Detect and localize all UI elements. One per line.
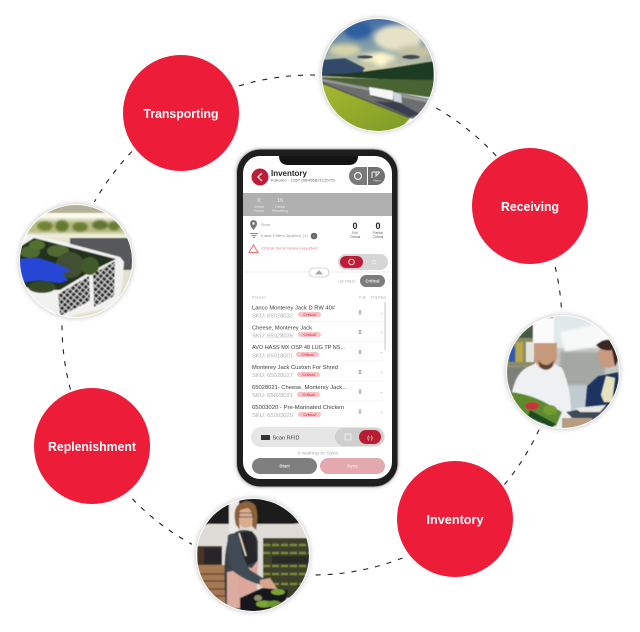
row 1: SKU: 65028032 <box>252 314 293 320</box>
full and partial critical counts: 0 <box>352 221 358 231</box>
product list: Full <box>359 294 366 300</box>
row 2: Critical <box>303 332 316 337</box>
start button <box>252 458 317 474</box>
phone mockup <box>234 147 400 489</box>
row 2: 0 <box>359 330 362 336</box>
row 4: - <box>381 370 383 376</box>
row 2: - <box>381 330 383 336</box>
product list: Product <box>252 294 267 300</box>
start button: Start <box>279 464 290 468</box>
settings and menu buttons: Menu <box>374 178 381 182</box>
critical summary band: 0 <box>257 198 261 204</box>
row 3: AVO HASS MX OSP 48 LUG TP NS... <box>252 345 345 351</box>
toggle switch <box>338 254 388 270</box>
scan RFID bar: Scan RFID <box>272 436 300 442</box>
full and partial critical counts: 0 <box>375 221 381 231</box>
product list: Partial <box>371 294 386 300</box>
row 1: Lanco Monterey Jack D RW 40# <box>252 306 336 312</box>
step: Receiving: Receiving <box>501 199 559 214</box>
row 4: SKU: 65028027 <box>252 373 293 379</box>
scan RFID bar: (·) <box>367 436 373 442</box>
settings and menu buttons <box>349 167 385 185</box>
row 6: - <box>381 410 383 416</box>
list filters: List Filters: <box>338 280 356 284</box>
store and filter info: Initial Filters Applied (1) <box>261 234 309 238</box>
row 5: SKU: 65028021 <box>252 393 293 399</box>
store and filter info: Critical Items below expected <box>261 246 317 250</box>
critical summary band <box>243 193 392 216</box>
row 3 <box>252 345 383 361</box>
store and filter info: i <box>314 234 315 238</box>
step: Inventory: Inventory <box>426 512 484 527</box>
photo: gloved hand with avocado crate <box>14 199 138 323</box>
store and filter info <box>249 220 317 252</box>
step: Replenishment <box>32 386 152 506</box>
row 5 <box>252 385 383 401</box>
store and filter info: Store <box>261 223 270 227</box>
row 5: 0 <box>359 390 362 396</box>
row 3: 0 <box>359 350 362 356</box>
critical summary band: Found <box>254 209 264 213</box>
row 4: 0 <box>359 370 362 376</box>
row 3: Critical <box>301 352 314 357</box>
step: Inventory <box>395 459 515 579</box>
collapse handle <box>309 268 329 277</box>
row 5: - <box>381 390 383 396</box>
step: Transporting: Transporting <box>144 106 219 121</box>
phone screen <box>243 156 392 479</box>
critical summary band: 16 <box>277 198 283 204</box>
row 2: Cheese, Monterey Jack <box>252 326 312 332</box>
full and partial critical counts: Partial <box>373 231 383 235</box>
product list <box>252 294 386 419</box>
row 6: SKU: 65003020 <box>252 413 293 419</box>
app header: Kokomo - 1257 (0840682112570) <box>271 178 335 182</box>
notch <box>279 156 358 165</box>
critical summary band: Critical <box>275 205 285 209</box>
step: Replenishment: Replenishment <box>48 439 137 454</box>
full and partial critical counts: Critical <box>373 235 384 239</box>
full and partial critical counts: Critical <box>350 235 361 239</box>
row 3: - <box>381 350 383 356</box>
row 4: Critical <box>302 372 315 377</box>
scan RFID bar <box>251 427 385 447</box>
phone body <box>236 149 398 487</box>
row 6: Critical <box>303 412 316 417</box>
row 1: Critical <box>303 312 316 317</box>
row 1: 0 <box>359 310 362 316</box>
sync button: Sync <box>347 464 358 468</box>
photo: woman with produce <box>191 493 315 617</box>
row 1 <box>252 306 383 322</box>
step: Transporting <box>121 53 241 173</box>
step: Receiving <box>470 146 590 266</box>
app header: Inventory <box>271 169 307 178</box>
row 3: SKU: 65018001 <box>252 354 293 360</box>
sync status: 0 waiting to Sync <box>298 450 339 456</box>
critical summary band: Critical <box>254 205 264 209</box>
row 5: Critical <box>302 392 315 397</box>
full and partial critical counts <box>350 222 384 238</box>
row 2 <box>252 326 383 342</box>
photo: chef and manager <box>501 310 626 434</box>
row 6 <box>252 405 382 417</box>
dashed cycle ring <box>62 75 562 575</box>
row 1: - <box>381 310 383 316</box>
row 6: 65003020 - Pre-Marinated Chicken <box>252 405 344 411</box>
app header <box>252 168 335 186</box>
list filters <box>338 275 385 287</box>
row 2: SKU: 65028035 <box>252 334 293 340</box>
sync button <box>320 458 385 474</box>
photo: truck on highway <box>316 13 440 137</box>
row 4: Monterey Jack Custom For Shred <box>252 365 338 371</box>
row 6: 0 <box>359 410 362 416</box>
list filters: Critical <box>365 278 380 284</box>
row 4 <box>252 365 383 381</box>
critical summary band: Remaining <box>272 209 288 213</box>
row 5: 65028021- Cheese, Monterey Jack... <box>252 385 347 391</box>
full and partial critical counts: Full <box>352 231 358 235</box>
